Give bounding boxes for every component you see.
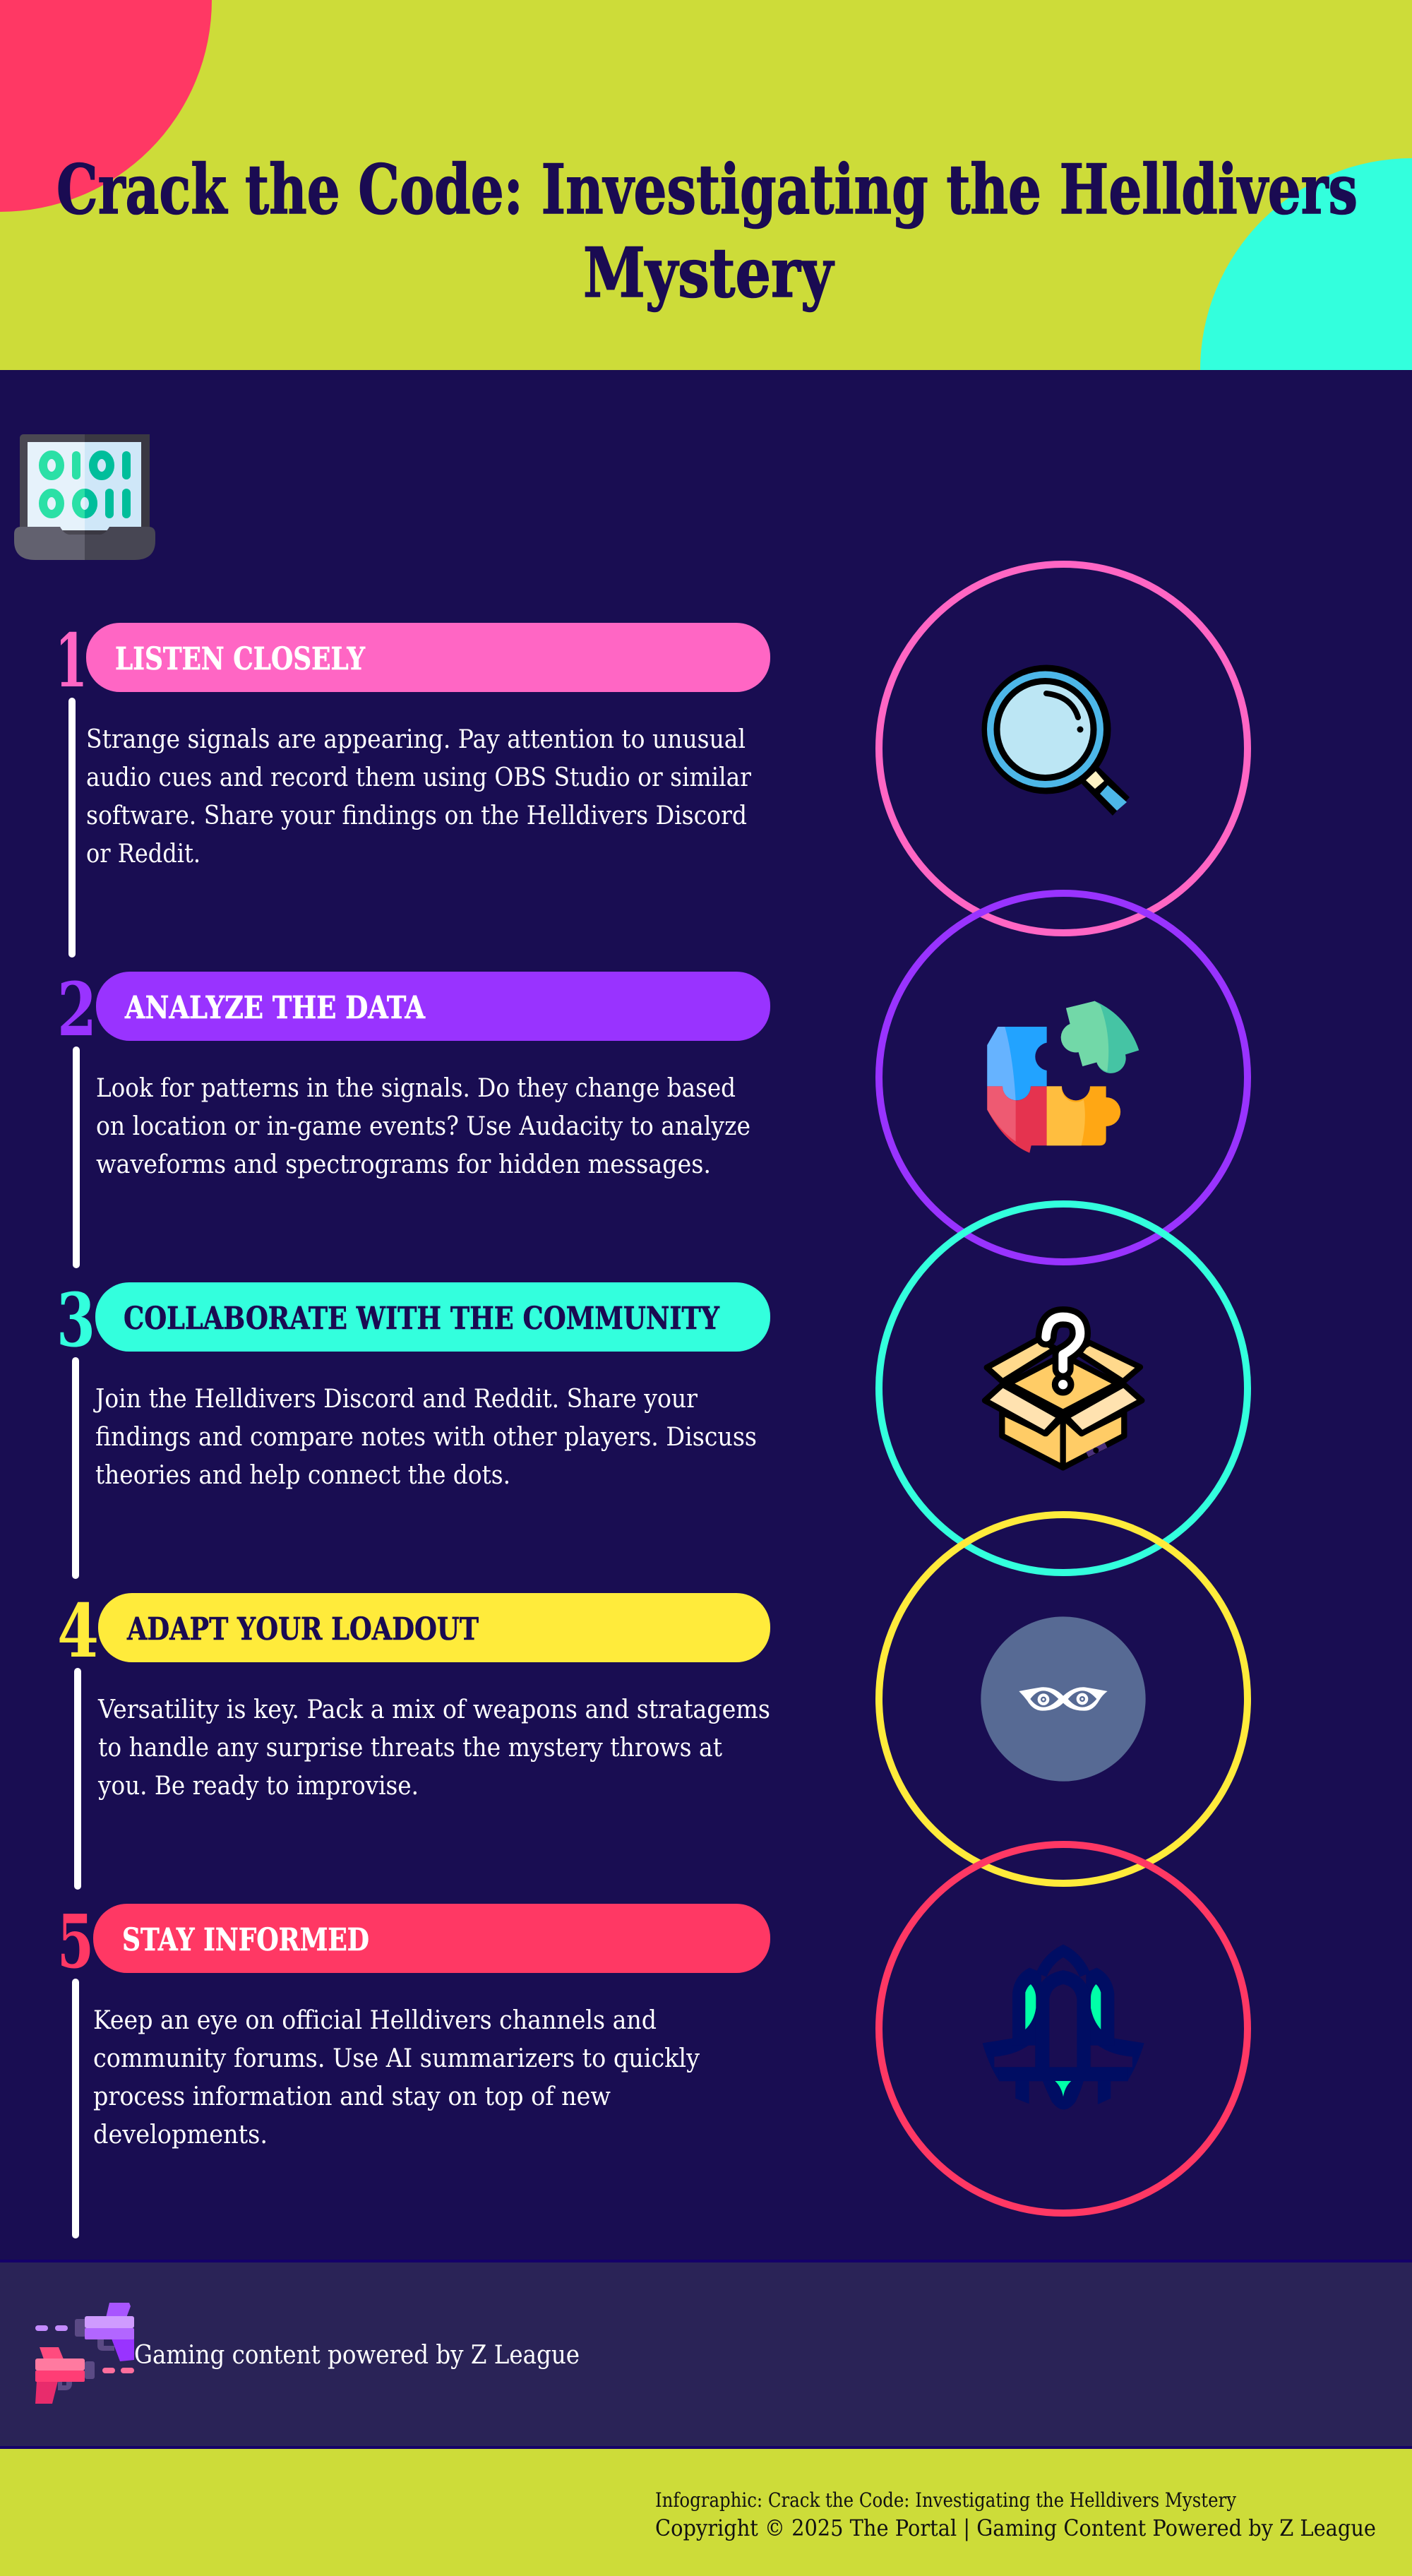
heading pill 2: ANALYZE THE DATA	[124, 990, 426, 1026]
ring: step 3	[879, 1204, 1248, 1573]
heading pill 4: ADAPT YOUR LOADOUT	[126, 1611, 479, 1647]
ring: step 2	[879, 893, 1248, 1262]
text 1: software. Share your findings on the Helldivers Discord	[86, 801, 747, 830]
text 4	[97, 1695, 770, 1801]
text 5	[93, 2006, 700, 2149]
number 5: 5	[57, 1898, 94, 1985]
icon: magnifying glass	[981, 665, 1130, 816]
text 3: findings and compare notes with other players. Discuss	[95, 1423, 757, 1452]
text 2: on location or in-game events? Use Audacity to analyze	[96, 1112, 750, 1141]
text 5: process information and stay on top of new	[93, 2082, 611, 2111]
ring: step 4	[879, 1515, 1248, 1883]
heading pill 2	[96, 972, 770, 1041]
text 1: or Reddit.	[86, 840, 201, 869]
bar 5	[72, 1979, 79, 2238]
heading pill 3	[95, 1282, 770, 1352]
icon: mystery box	[985, 1317, 1142, 1467]
number 2: 2	[57, 966, 97, 1053]
step 1: listen closely	[55, 617, 770, 958]
text 4: you. Be ready to improvise.	[97, 1772, 419, 1801]
number 3: 3	[56, 1277, 95, 1364]
text 3	[92, 1385, 757, 1490]
heading pill 5: STAY INFORMED	[122, 1922, 369, 1958]
title	[56, 150, 1358, 313]
ring: step 1	[879, 564, 1248, 933]
heading pill 1	[86, 623, 770, 692]
title: Mystery	[583, 233, 835, 313]
bar 3	[72, 1357, 79, 1579]
text 1: Strange signals are appearing. Pay attention to unusual	[86, 725, 746, 754]
text 3: Join the Helldivers Discord and Reddit. Share your	[92, 1385, 698, 1414]
bar 2	[73, 1046, 80, 1268]
heading pill 3: COLLABORATE WITH THE COMMUNITY	[124, 1301, 719, 1337]
icon: ray guns	[35, 2303, 134, 2404]
text 2	[96, 1074, 750, 1179]
sponsor strip	[0, 2260, 1412, 2449]
footer band	[0, 2449, 1412, 2576]
header band	[0, 0, 1412, 370]
text 2: Look for patterns in the signals. Do they change based	[96, 1074, 736, 1103]
text 2: waveforms and spectrograms for hidden messages.	[96, 1150, 711, 1179]
step 3: collaborate with the community	[56, 1277, 770, 1579]
step 4: adapt your loadout	[57, 1587, 770, 1890]
icon: rocket ship	[983, 1951, 1144, 2109]
text 3: theories and help connect the dots.	[95, 1461, 510, 1490]
number 1: 1	[55, 617, 88, 704]
footer credit line: Infographic: Crack the Code: Investigating the Helldivers Mystery	[655, 2488, 1236, 2512]
bar 4	[74, 1668, 81, 1890]
heading pill 5	[93, 1904, 770, 1973]
step 2: analyze the data	[57, 966, 770, 1268]
ring: step 5	[879, 1844, 1248, 2213]
heading pill 4	[98, 1593, 770, 1662]
icon: laptop with binary	[14, 434, 155, 560]
sponsor text: Gaming content powered by Z League	[134, 2341, 580, 2370]
number 4: 4	[57, 1587, 99, 1674]
text 4: to handle any surprise threats the mystery throws at	[98, 1734, 722, 1763]
step 5: stay informed	[57, 1898, 770, 2238]
text 1: audio cues and record them using OBS Studio or similar	[86, 763, 752, 792]
bar 1	[68, 698, 76, 958]
text 5: developments.	[93, 2121, 268, 2149]
text 5: Keep an eye on official Helldivers channels and	[93, 2006, 657, 2035]
heading pill 1: LISTEN CLOSELY	[115, 641, 365, 677]
text 5: community forums. Use AI summarizers to quickly	[93, 2044, 700, 2073]
icon: puzzle pieces	[987, 1001, 1139, 1153]
text 1	[86, 725, 752, 869]
icon: eyes mask badge	[981, 1616, 1146, 1782]
text 4: Versatility is key. Pack a mix of weapons and stratagems	[97, 1695, 770, 1724]
